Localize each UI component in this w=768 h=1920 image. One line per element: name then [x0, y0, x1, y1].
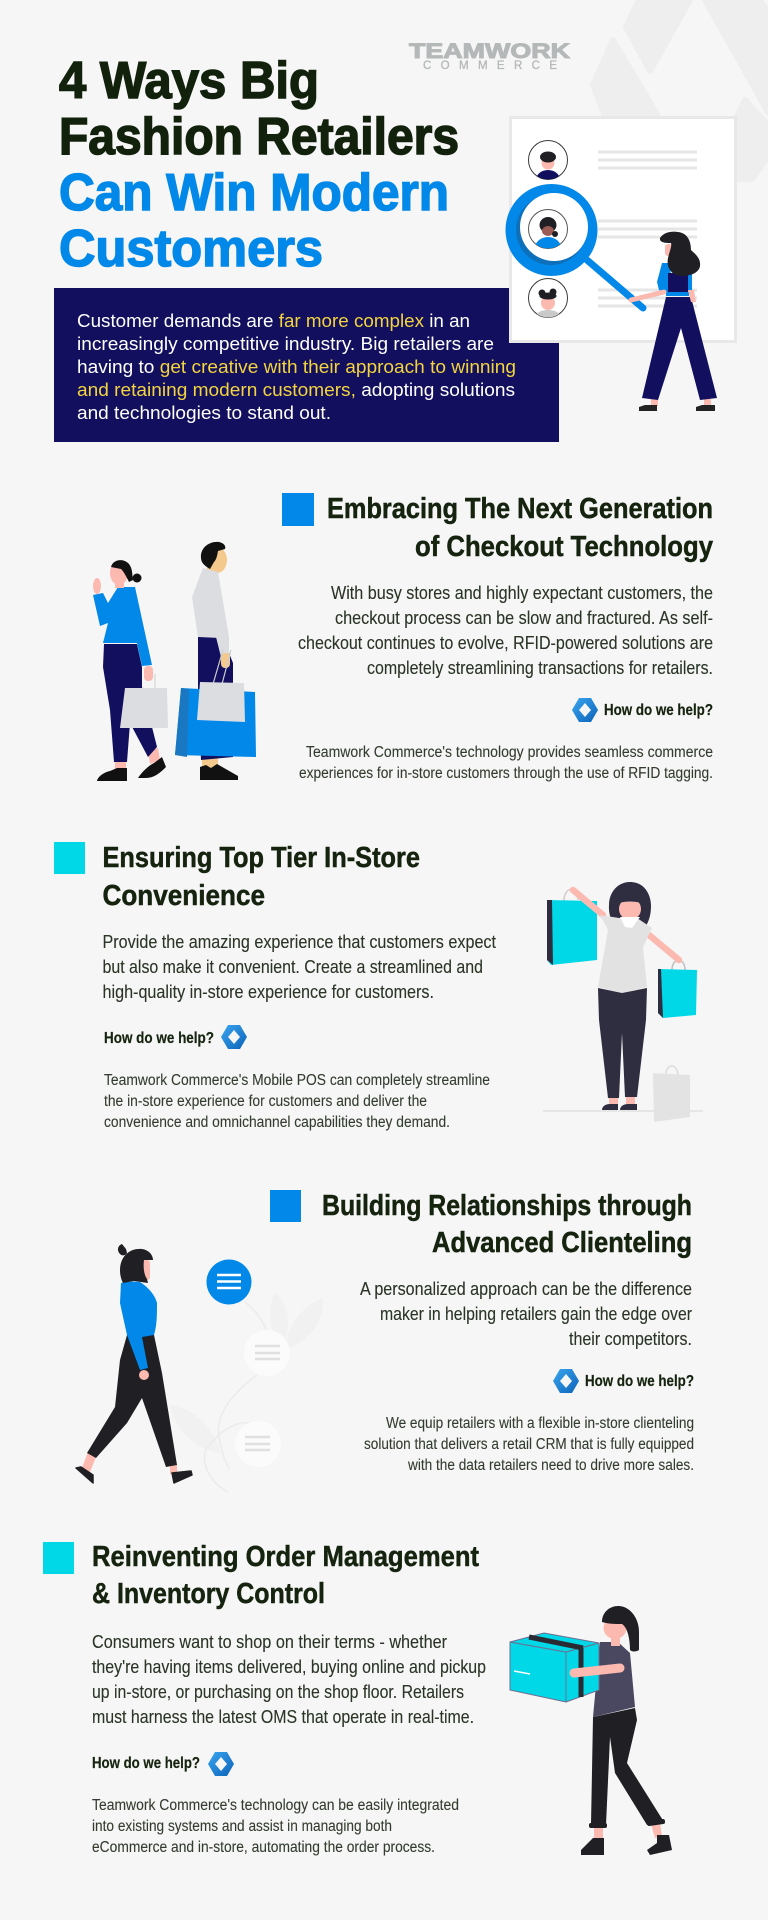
logo: Teamwork Commerce: TEAMWORK — [409, 40, 570, 63]
icon: Teamwork mark — [208, 1752, 234, 1776]
blue bubble — [206, 1260, 252, 1304]
logo: Teamwork Commerce: COMMERCE — [423, 60, 557, 72]
body text: but also make it convenient. Create a streamlined and — [102, 956, 483, 977]
help text — [299, 744, 713, 782]
help text: eCommerce and in-store, automating the order process. — [92, 1839, 435, 1856]
heading — [322, 1190, 692, 1259]
body text: Consumers want to shop on their terms - whether — [92, 1631, 447, 1652]
how do we help label: How do we help? — [104, 1030, 214, 1047]
help text: Teamwork Commerce's technology provides seamless commerce — [306, 744, 713, 761]
watermark logo shapes — [593, 0, 768, 179]
illustration: woman carrying box — [510, 1606, 672, 1855]
man with bags — [175, 542, 256, 780]
help text: experiences for in-store customers through the use of RFID tagging. — [299, 765, 713, 782]
magnifier — [506, 184, 643, 308]
help text: convenience and omnichannel capabilities they demand. — [104, 1114, 450, 1131]
box strap — [529, 1637, 583, 1697]
body text — [360, 1278, 692, 1349]
walking woman — [76, 1244, 192, 1483]
logo: Teamwork Commerce — [409, 40, 570, 72]
panel: intro: increasingly competitive industry. Big retailers are — [77, 333, 494, 354]
avatar three — [528, 278, 568, 322]
help text: Teamwork Commerce's technology can be easily integrated — [92, 1797, 459, 1814]
left bag — [547, 889, 597, 965]
gray bag — [653, 1066, 690, 1122]
panel: intro: having to get creative with their approach to winning — [77, 356, 516, 377]
help text: We equip retailers with a flexible in-store clienteling — [386, 1415, 694, 1432]
illustration: woman with shopping bags — [543, 882, 703, 1122]
icon: Teamwork mark — [221, 1025, 247, 1049]
marker square — [54, 842, 85, 874]
woman holding magnifier — [631, 232, 717, 411]
body text — [92, 1631, 486, 1727]
title — [59, 52, 459, 278]
section 4: order management — [43, 1541, 486, 1856]
icon: Teamwork mark — [572, 698, 598, 722]
panel: intro: and retaining modern customers, adopting solutions — [77, 379, 515, 400]
box — [510, 1633, 599, 1702]
body text — [102, 931, 496, 1002]
body text: completely streamlining transactions for retailers. — [367, 657, 713, 678]
illustration: two shoppers — [93, 542, 256, 781]
avatar one — [528, 140, 568, 180]
avatar two — [528, 209, 568, 249]
body text: With busy stores and highly expectant customers, the — [331, 582, 713, 603]
section 2: in-store convenience — [54, 842, 496, 1131]
arm — [574, 1668, 620, 1673]
body text: maker in helping retailers gain the edge over — [380, 1303, 692, 1324]
illustration: customer profile search — [506, 118, 736, 411]
heading: & Inventory Control — [92, 1578, 325, 1610]
woman figure — [573, 882, 679, 1110]
icon: Teamwork mark — [553, 1369, 579, 1393]
connector curves — [205, 1302, 267, 1492]
box label — [514, 1671, 530, 1674]
right bag — [658, 960, 697, 1018]
heading: Reinventing Order Management — [92, 1541, 479, 1573]
heading: Convenience — [102, 880, 265, 912]
body text: checkout process can be slow and fractured. As self- — [335, 607, 713, 628]
heading: of Checkout Technology — [415, 531, 713, 563]
panel: intro: Customer demands are far more complex in an — [77, 310, 470, 331]
marker square — [282, 493, 314, 526]
heading: Ensuring Top Tier In-Store — [102, 842, 420, 874]
help text: with the data retailers need to drive more sales. — [407, 1457, 694, 1474]
heading: Building Relationships through — [322, 1190, 692, 1222]
heading — [102, 842, 420, 912]
woman figure — [581, 1606, 672, 1855]
how do we help label: How do we help? — [585, 1373, 694, 1390]
help text: Teamwork Commerce's Mobile POS can completely streamline — [104, 1072, 490, 1089]
body text: they're having items delivered, buying online and pickup — [92, 1656, 486, 1677]
floor line — [543, 1110, 703, 1112]
body text: their competitors. — [569, 1328, 692, 1349]
help text: the in-store experience for customers and deliver the — [104, 1093, 427, 1110]
help text: into existing systems and assist in managing both — [92, 1818, 392, 1835]
title: 4 Ways Big — [59, 52, 319, 110]
body text: checkout continues to evolve, RFID-powered solutions are — [298, 632, 713, 653]
body text — [298, 582, 713, 678]
panel: intro — [54, 288, 559, 442]
help text: solution that delivers a retail CRM that is fully equipped — [364, 1436, 694, 1453]
how do we help label: How do we help? — [92, 1755, 200, 1772]
marker square — [43, 1542, 74, 1574]
woman with bag — [93, 560, 168, 781]
title: Fashion Retailers — [59, 108, 459, 166]
faint leaves — [170, 1292, 323, 1453]
how do we help label: How do we help? — [604, 702, 713, 719]
help text — [364, 1415, 694, 1474]
body text: must harness the latest OMS that operate in real-time. — [92, 1706, 474, 1727]
body text: A personalized approach can be the difference — [360, 1278, 692, 1299]
body text: Provide the amazing experience that customers expect — [102, 931, 496, 952]
white bubble bottom — [235, 1421, 281, 1467]
help text — [104, 1072, 490, 1131]
white bubble top — [244, 1330, 290, 1376]
panel: intro: and technologies to stand out. — [77, 402, 331, 423]
body text: high-quality in-store experience for customers. — [102, 981, 434, 1002]
heading: Embracing The Next Generation — [327, 493, 713, 525]
title: Can Win Modern — [59, 164, 449, 222]
heading — [92, 1541, 479, 1610]
marker square — [270, 1190, 301, 1222]
heading — [327, 493, 713, 563]
section 1: checkout technology — [282, 493, 713, 782]
body text: up in-store, or purchasing on the shop floor. Retailers — [92, 1681, 464, 1702]
help text — [92, 1797, 459, 1856]
title: Customers — [59, 220, 323, 278]
heading: Advanced Clienteling — [432, 1227, 692, 1259]
section 3: clienteling — [270, 1190, 694, 1474]
illustration: woman walking past profile bubbles — [76, 1244, 323, 1492]
